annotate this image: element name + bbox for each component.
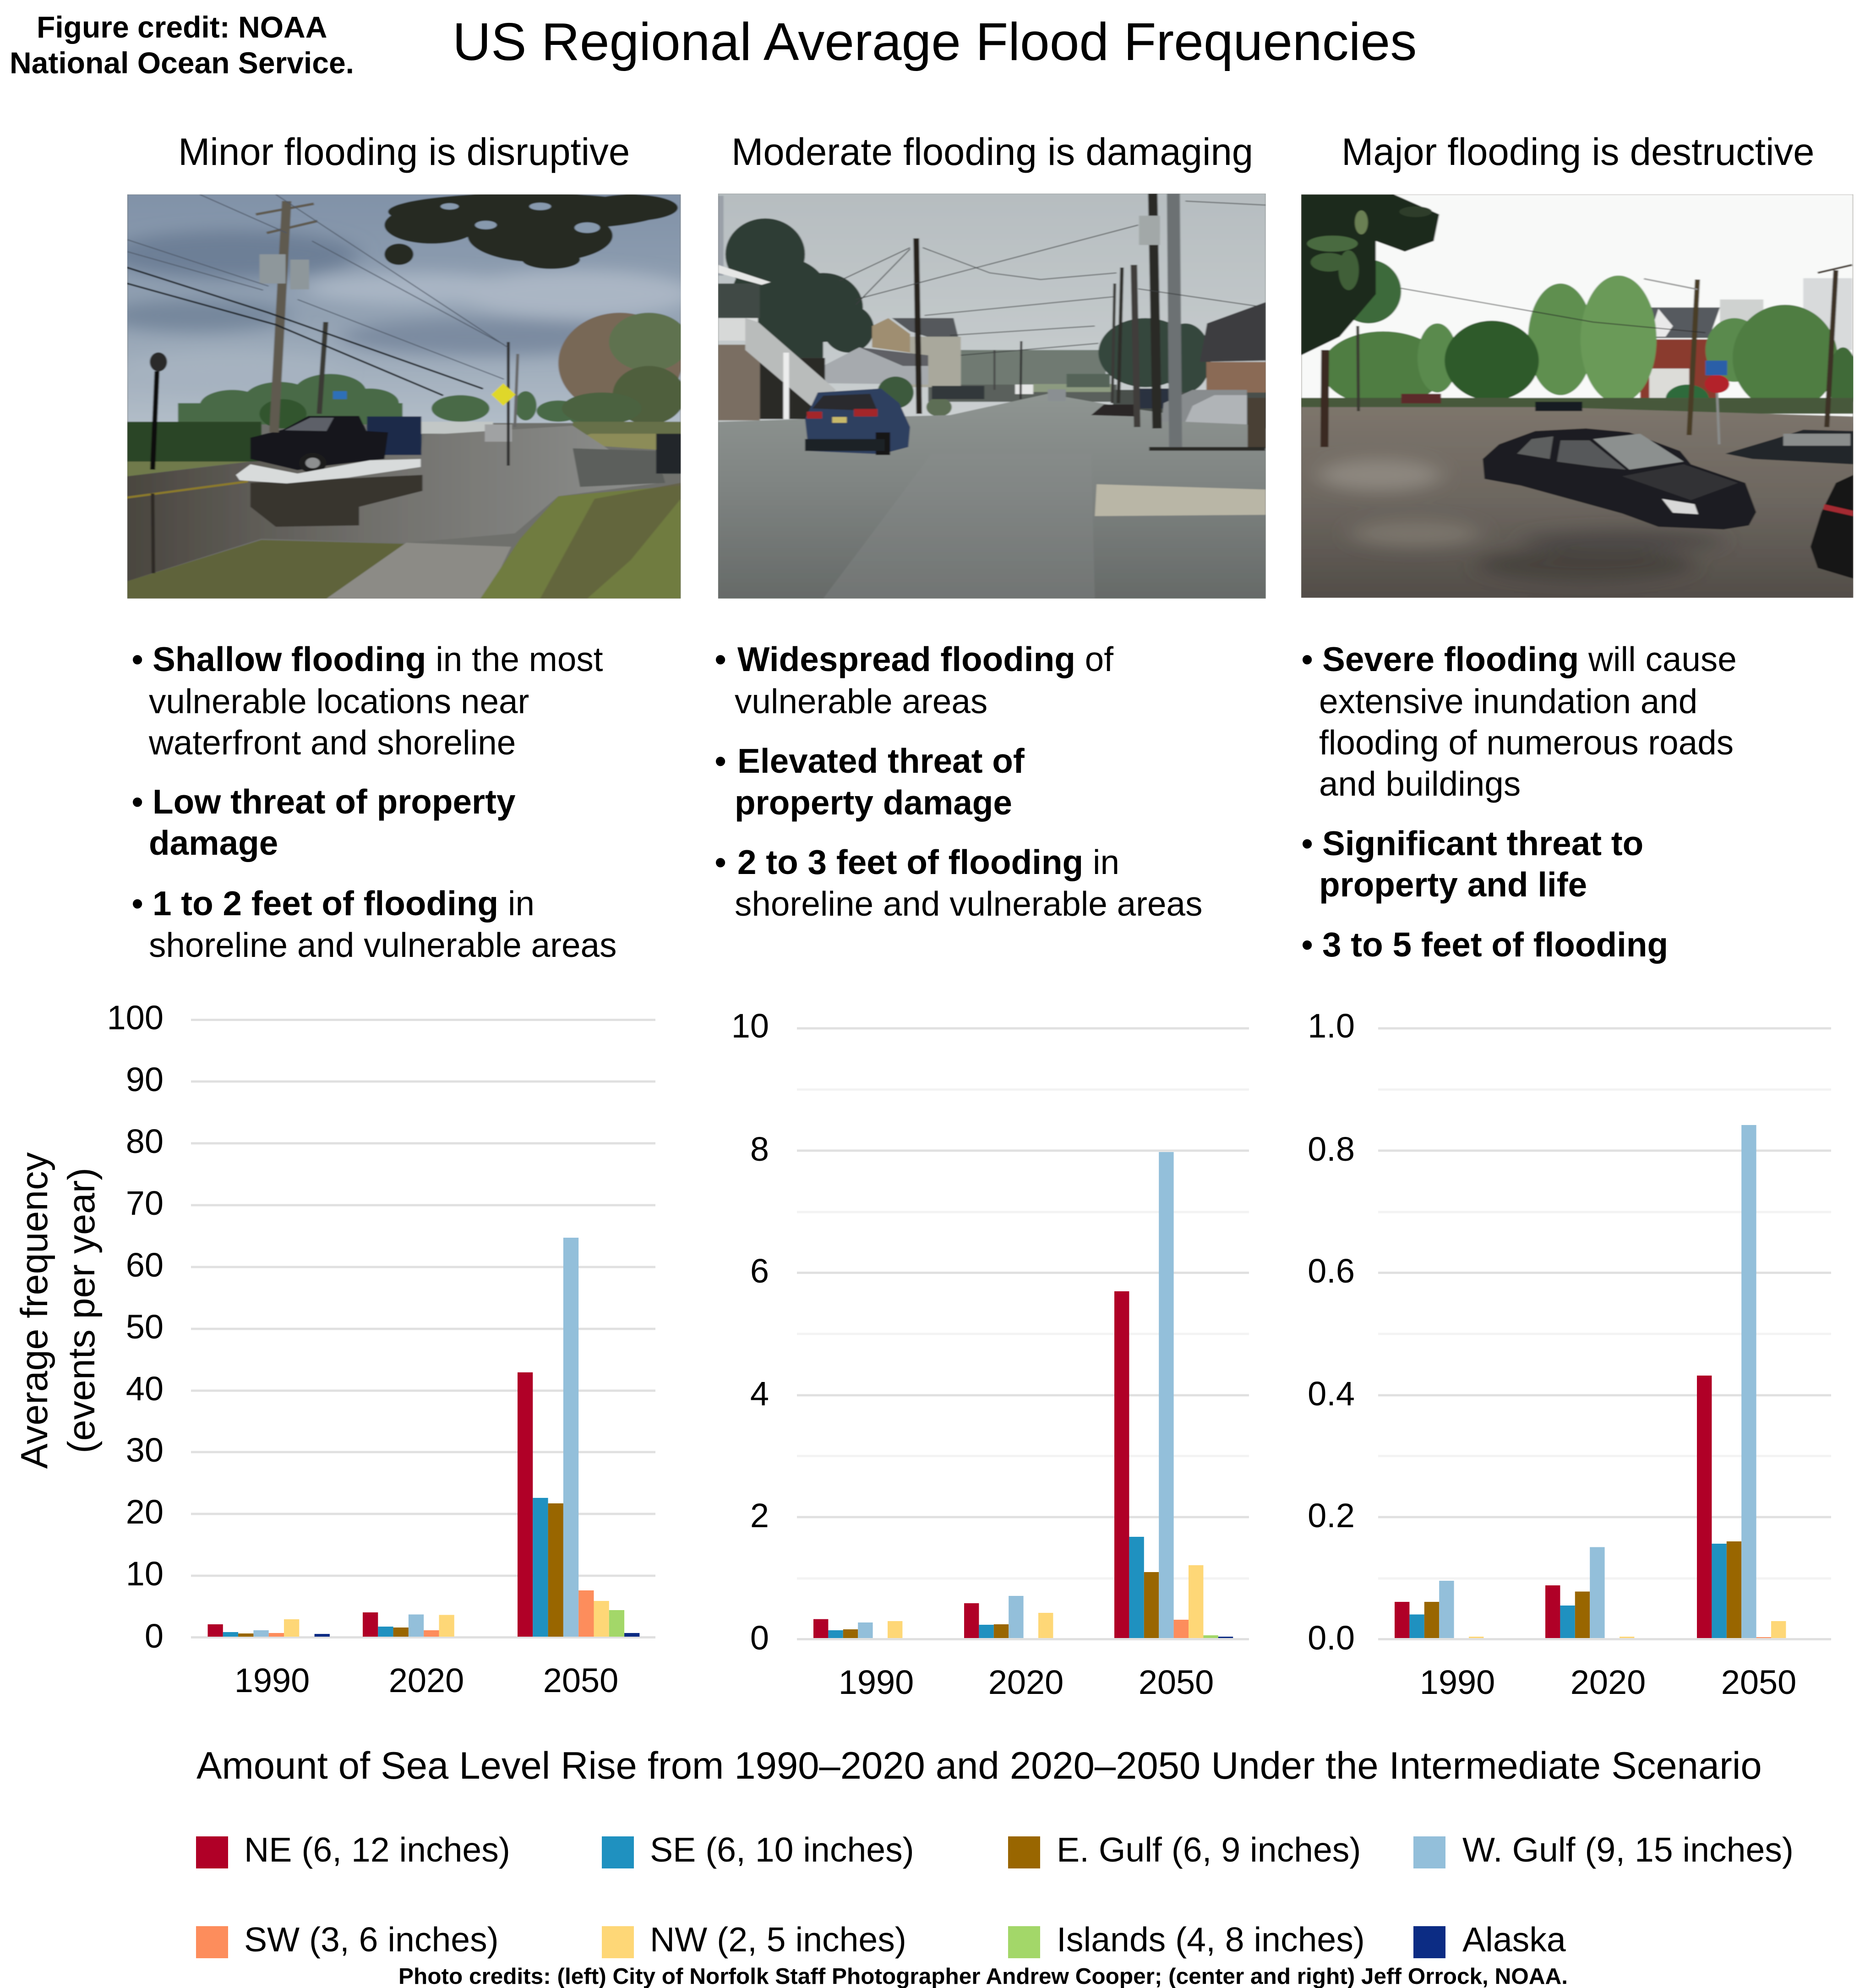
text block: major flooding bullets: flooding of numerous roads <box>1319 723 1734 762</box>
y-axis labels: 0.2 <box>1308 1496 1355 1535</box>
text block: major flooding bullets: property and life <box>1319 865 1587 904</box>
legend item: W. Gulf: W. Gulf (9, 15 inches) <box>1462 1830 1794 1869</box>
y-axis labels: 60 <box>126 1246 164 1284</box>
y-axis title <box>13 1152 103 1469</box>
text block: minor flooding bullets: vulnerable locations near <box>149 682 529 721</box>
bars: 2020 <box>363 1612 454 1637</box>
legend <box>196 1830 1794 1959</box>
legend item: Islands: Islands (4, 8 inches) <box>1057 1920 1365 1959</box>
text block: moderate flooding bullets: • <box>714 640 726 678</box>
y-axis labels: 90 <box>126 1060 164 1098</box>
text block: major flooding bullets: extensive inundation and <box>1319 682 1697 721</box>
y-axis labels: 100 <box>107 999 164 1037</box>
legend heading: Amount of Sea Level Rise from 1990–2020 and 2020–2050 Under the Intermediate Scenario <box>196 1744 1762 1787</box>
heading: minor flooding: Minor flooding is disruptive <box>178 131 630 173</box>
figure credit: National Ocean Service. <box>10 46 354 80</box>
y-axis labels: 70 <box>126 1184 164 1222</box>
y-axis labels: 8 <box>750 1130 769 1168</box>
y-axis labels: 10 <box>126 1555 164 1593</box>
x-axis labels: 2020 <box>988 1663 1063 1701</box>
y-axis labels: 40 <box>126 1370 164 1408</box>
y-axis labels <box>731 1007 769 1657</box>
text block: major flooding bullets: Severe flooding will cause <box>1322 640 1737 678</box>
chart: minor flooding frequency <box>107 999 655 1699</box>
photo: minor flooding, truck towing trailer through shallow water <box>102 188 696 605</box>
legend item: E. Gulf: E. Gulf (6, 9 inches) <box>1057 1830 1361 1869</box>
x-axis labels: 2050 <box>1721 1663 1796 1701</box>
x-axis labels: 1990 <box>234 1661 310 1699</box>
heading: moderate flooding: Moderate flooding is damaging <box>731 131 1253 173</box>
y-axis labels: 0.8 <box>1308 1130 1355 1168</box>
y-axis labels: 20 <box>126 1493 164 1531</box>
text block: major flooding bullets: and buildings <box>1319 765 1521 803</box>
text block: major flooding bullets: 3 to 5 feet of flooding <box>1322 925 1668 964</box>
y-axis labels <box>1308 1007 1355 1657</box>
bars: 1990 <box>813 1619 902 1638</box>
y-axis labels: 50 <box>126 1308 164 1346</box>
figure credit <box>10 10 354 80</box>
bars: 2050 <box>1697 1125 1786 1638</box>
title: US Regional Average Flood Frequencies <box>453 12 1417 71</box>
text block: minor flooding bullets: shoreline and vulnerable areas <box>149 926 616 964</box>
x-axis labels: 1990 <box>839 1663 914 1701</box>
y-axis labels: 0.0 <box>1308 1619 1355 1657</box>
y-axis labels: 80 <box>126 1122 164 1160</box>
y-axis labels: 0.4 <box>1308 1375 1355 1413</box>
bars: 2020 <box>964 1596 1053 1638</box>
text block: major flooding bullets: Significant threat to <box>1322 824 1643 863</box>
y-axis labels: 30 <box>126 1431 164 1469</box>
text block: moderate flooding bullets: Widespread flooding of <box>737 640 1113 678</box>
text block: major flooding bullets: • <box>1301 824 1313 863</box>
text block: minor flooding bullets: 1 to 2 feet of flooding in <box>153 884 534 923</box>
chart: moderate flooding frequency <box>731 1007 1249 1701</box>
y-axis labels: 10 <box>731 1007 769 1045</box>
text block: moderate flooding bullets: • <box>714 843 726 881</box>
y-axis title: (events per year) <box>60 1168 103 1453</box>
text block: moderate flooding bullets: • <box>714 742 726 780</box>
bars: 2050 <box>1114 1152 1233 1638</box>
legend item: SE: SE (6, 10 inches) <box>650 1830 914 1869</box>
legend item: Alaska: Alaska <box>1462 1920 1566 1959</box>
x-axis labels: 2050 <box>543 1661 618 1699</box>
x-axis labels: 1990 <box>1420 1663 1495 1701</box>
y-axis labels: 0 <box>750 1619 769 1657</box>
bars: 1990 <box>208 1619 330 1637</box>
text block: moderate flooding bullets <box>714 640 1202 923</box>
legend item: SW: SW (3, 6 inches) <box>244 1920 499 1959</box>
bars: 2050 <box>518 1238 639 1637</box>
legend item: NE: NE (6, 12 inches) <box>244 1830 510 1869</box>
heading: major flooding: Major flooding is destructive <box>1342 131 1814 173</box>
x-axis labels: 2020 <box>1571 1663 1646 1701</box>
y-axis labels: 2 <box>750 1496 769 1535</box>
bars: 2020 <box>1545 1547 1634 1638</box>
y-axis labels <box>107 999 164 1655</box>
x-axis labels: 2050 <box>1139 1663 1214 1701</box>
y-axis labels: 0.6 <box>1308 1252 1355 1290</box>
text block: moderate flooding bullets: property damage <box>735 783 1012 822</box>
legend item: Alaska <box>1413 1920 1566 1959</box>
x-axis labels: 2020 <box>389 1661 464 1699</box>
text block: moderate flooding bullets: vulnerable areas <box>735 682 987 721</box>
text block: minor flooding bullets: Low threat of property <box>153 782 516 821</box>
text block: major flooding bullets <box>1301 640 1737 964</box>
text block: minor flooding bullets: • <box>131 640 143 678</box>
bars: 1990 <box>1395 1581 1483 1638</box>
x-axis labels <box>234 1661 618 1699</box>
text block: minor flooding bullets: • <box>131 782 143 821</box>
x-axis labels <box>839 1663 1214 1701</box>
text block: moderate flooding bullets: Elevated threat of <box>737 742 1025 780</box>
text block: minor flooding bullets: waterfront and shoreline <box>148 723 516 762</box>
text block: moderate flooding bullets: 2 to 3 feet of flooding in <box>737 843 1119 881</box>
photo: moderate flooding, flooded street with SUV <box>714 188 1282 605</box>
figure credit: Figure credit: NOAA <box>37 10 327 44</box>
text block: major flooding bullets: • <box>1301 640 1313 678</box>
y-axis labels: 0 <box>145 1617 164 1655</box>
y-axis labels: 1.0 <box>1308 1007 1355 1045</box>
photo: major flooding, submerged black sedan <box>1296 188 1864 605</box>
y-axis labels: 4 <box>750 1375 769 1413</box>
text block: major flooding bullets: • <box>1301 925 1313 964</box>
legend item: NW: NW (2, 5 inches) <box>650 1920 906 1959</box>
text block: minor flooding bullets <box>131 640 616 964</box>
y-axis title: Average frequency <box>13 1152 55 1469</box>
text block: minor flooding bullets: • <box>131 884 143 923</box>
chart: major flooding frequency <box>1308 1007 1831 1701</box>
text block: minor flooding bullets: damage <box>149 824 278 862</box>
text block: moderate flooding bullets: shoreline and vulnerable areas <box>735 885 1202 923</box>
text block: minor flooding bullets: Shallow flooding in the most <box>153 640 603 678</box>
y-axis labels: 6 <box>750 1252 769 1290</box>
x-axis labels <box>1420 1663 1796 1701</box>
